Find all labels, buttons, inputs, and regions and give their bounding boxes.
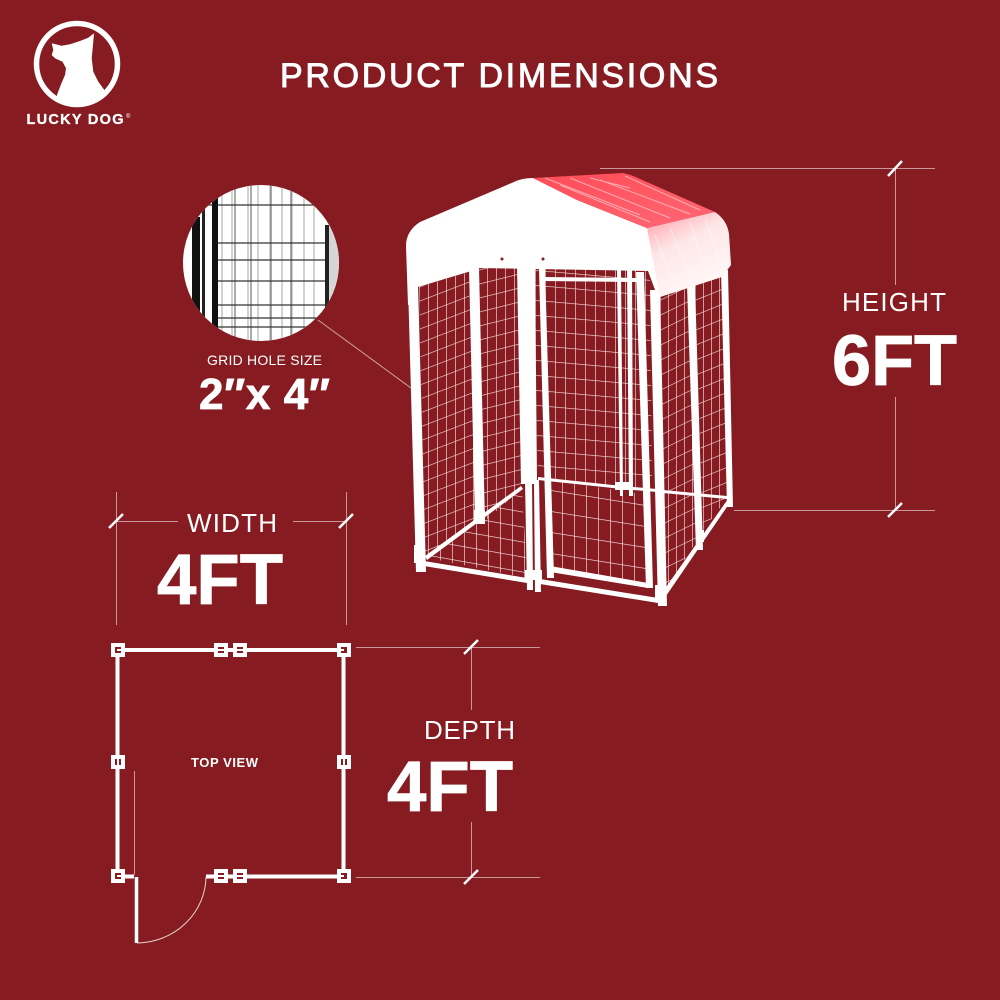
roof front bbox=[406, 178, 667, 305]
logo wordmark: LUCKY DOG bbox=[26, 112, 124, 128]
height value: 6FT bbox=[832, 322, 957, 401]
height label: HEIGHT bbox=[842, 287, 946, 317]
width value: 4FT bbox=[157, 541, 283, 620]
leader line bbox=[318, 320, 411, 388]
door leaf bbox=[135, 877, 138, 943]
open door guide line bbox=[134, 771, 136, 875]
roof side bbox=[647, 212, 731, 297]
wire mesh panels bbox=[419, 268, 728, 590]
depth label: DEPTH bbox=[424, 715, 515, 745]
roof grommets bbox=[500, 258, 544, 260]
post inner bars bbox=[118, 650, 344, 876]
top view floor plan bbox=[113, 645, 349, 943]
roof streaks bbox=[545, 176, 720, 280]
grid size value: 2″x 4″ bbox=[199, 370, 330, 419]
grid label: GRID HOLE SIZE bbox=[207, 352, 322, 368]
frame posts and rails bbox=[408, 266, 733, 606]
corner post inner marks bbox=[117, 650, 344, 876]
icon: dog silhouette bbox=[52, 33, 104, 102]
plan walls bbox=[118, 650, 344, 876]
top view label: TOP VIEW bbox=[191, 755, 259, 770]
roof top bbox=[533, 173, 715, 228]
kennel illustration bbox=[406, 173, 733, 606]
registered mark: ® bbox=[126, 113, 131, 120]
width dimension bbox=[109, 492, 353, 625]
logo: Lucky Dog bbox=[26, 24, 131, 128]
detail circle bbox=[183, 185, 339, 341]
depth dimension bbox=[356, 640, 540, 884]
height dimension bbox=[600, 161, 957, 517]
plan posts bbox=[113, 645, 349, 881]
width label: WIDTH bbox=[187, 508, 277, 538]
grid hole detail bbox=[180, 180, 411, 419]
depth value: 4FT bbox=[387, 748, 513, 827]
door swing arc bbox=[137, 877, 206, 943]
title: PRODUCT DIMENSIONS bbox=[280, 57, 718, 95]
